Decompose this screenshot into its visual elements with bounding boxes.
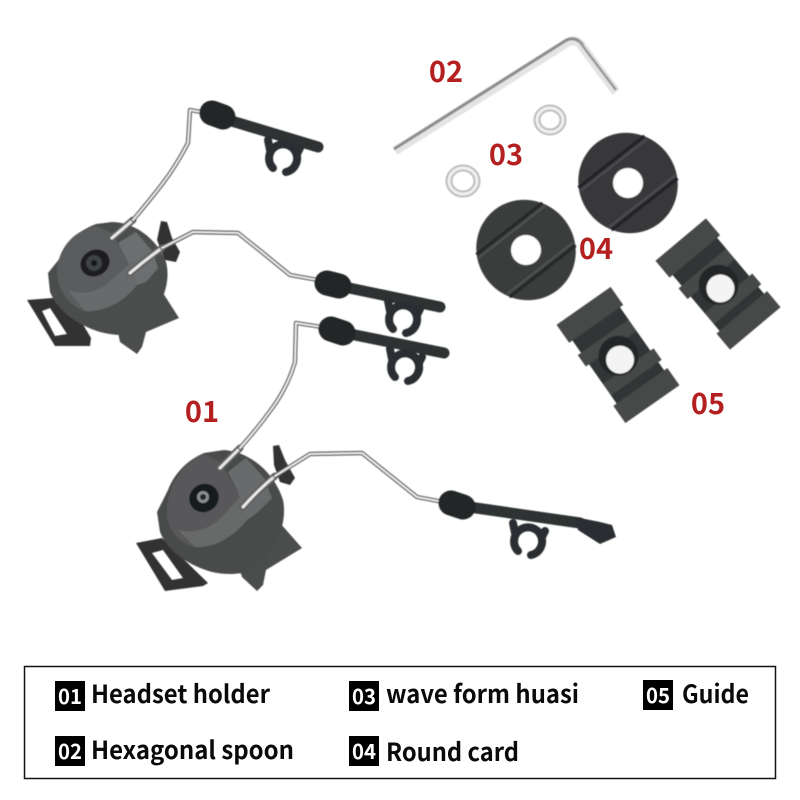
holder wedge (228, 458, 272, 520)
legend panel (24, 666, 776, 778)
wave washer upper (537, 108, 563, 132)
holder body (157, 450, 284, 574)
number label 03: 03 (489, 132, 523, 174)
wire to lower arm (130, 232, 318, 280)
number label 02: 02 (429, 49, 463, 91)
legend item 02: 02 (58, 736, 82, 766)
legend item 04: 04 (352, 736, 376, 766)
wire to upper arm (112, 110, 207, 238)
wire to lower arm (243, 453, 443, 507)
number label 05: 05 (691, 381, 725, 423)
round card lower (456, 180, 596, 320)
hexagonal spoon (394, 39, 616, 151)
lower arm (327, 283, 440, 333)
guide upper (655, 218, 781, 350)
holder face (167, 454, 247, 547)
mounting strap (27, 298, 91, 346)
lower arm (451, 503, 616, 555)
legend item 05: 05 (646, 680, 670, 710)
round card upper (558, 113, 698, 253)
upper arm (212, 113, 318, 172)
legend item 01: 01 (58, 681, 82, 711)
rear clip (157, 221, 180, 262)
legend item 04: Round card (386, 733, 519, 769)
legend item 05: Guide (682, 675, 749, 711)
holder body (48, 222, 168, 335)
legend item 03: wave form huasi (386, 675, 579, 711)
number label 01: 01 (185, 389, 219, 431)
number label 04: 04 (579, 226, 613, 268)
base foot (115, 293, 179, 354)
holder screw (76, 244, 114, 282)
holder wedge (118, 232, 158, 285)
legend item 01: Headset holder (91, 675, 270, 711)
base foot (235, 523, 302, 591)
guide lower (557, 287, 679, 423)
upper arm (331, 329, 444, 381)
rear clip (273, 445, 295, 485)
wire to upper arm (220, 323, 322, 468)
headset holder: lower assembly (136, 323, 616, 591)
wave washer lower (449, 168, 477, 194)
holder face (57, 226, 137, 311)
mounting strap (136, 538, 208, 591)
legend item 02: Hexagonal spoon (91, 731, 294, 767)
legend item 03: 03 (352, 681, 376, 711)
headset holder: upper assembly (27, 110, 440, 354)
legend item 05 (643, 675, 749, 711)
holder screw (184, 478, 224, 518)
